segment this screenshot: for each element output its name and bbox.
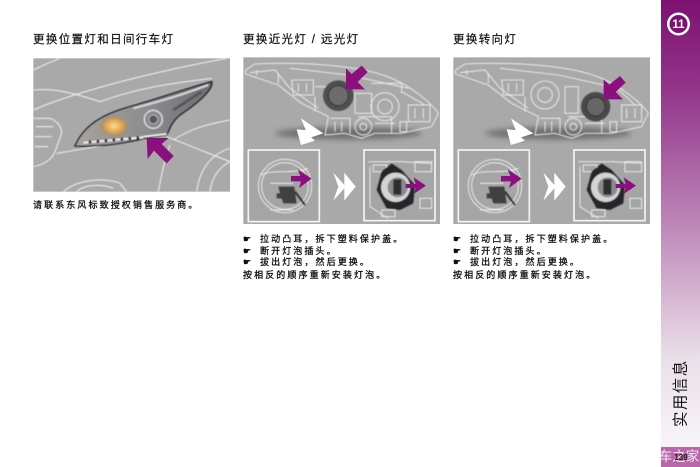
text: low and high beam steps: 拉动凸耳，拆下塑料保护盖。 — [260, 233, 404, 244]
panel: headlamp on car — [33, 58, 230, 192]
text: turn signal steps: 拉动凸耳，拆下塑料保护盖。 — [470, 233, 614, 244]
text: turn signal steps: ☛ — [453, 246, 461, 256]
icon: chapter number 11: 11 — [672, 19, 685, 31]
text: turn signal steps: ☛ — [453, 257, 461, 267]
inset: connector — [458, 150, 529, 222]
lamp cover — [581, 92, 610, 121]
text: low and high beam steps: ☛ — [243, 257, 251, 267]
text: turn signal steps: 按相反的顺序重新安装灯泡。 — [453, 269, 597, 280]
heading: turn signal: 更换转向灯 — [453, 32, 517, 46]
text: low and high beam steps: ☛ — [243, 246, 251, 256]
arrow — [346, 66, 368, 89]
arrow — [604, 76, 626, 99]
text: turn signal steps — [453, 233, 614, 280]
panel: low and high beam bulb — [243, 57, 440, 224]
sidebar: chapter tab — [659, 0, 700, 467]
inset: connector — [248, 150, 319, 222]
text: turn signal steps: 拔出灯泡，然后更换。 — [470, 256, 581, 267]
text: low and high beam steps: 按相反的顺序重新安装灯泡。 — [243, 269, 387, 280]
text: low and high beam steps — [243, 233, 404, 280]
sidebar title: 实用信息: 实用信息 — [672, 359, 690, 427]
text: low and high beam steps: 拔出灯泡，然后更换。 — [260, 256, 371, 267]
text: low and high beam steps: ☛ — [243, 234, 251, 244]
inset: bulb — [574, 150, 645, 221]
white direction chevrons — [507, 118, 533, 145]
headlamp — [75, 82, 212, 146]
double chevron — [543, 173, 566, 201]
lamp cover — [323, 80, 354, 111]
panel: turn signal bulb — [453, 57, 650, 224]
heading: position and daytime lights: 更换位置灯和日间行车灯 — [33, 32, 174, 46]
page number box with watermark: 139 — [674, 453, 688, 462]
text: caption: 请联系东风标致授权销售服务商。 — [33, 199, 200, 210]
double chevron — [333, 173, 356, 201]
page number box with watermark: 车之家 — [659, 448, 700, 464]
headlamp unit line drawing — [456, 63, 648, 138]
text: turn signal steps: 断开灯泡插头。 — [470, 245, 548, 256]
text: low and high beam steps: 断开灯泡插头。 — [260, 245, 338, 256]
headlamp unit line drawing — [246, 63, 438, 138]
text: turn signal steps: ☛ — [453, 234, 461, 244]
heading: low and high beam: 更换近光灯 / 远光灯 — [243, 32, 359, 46]
icon: chapter number 11 — [667, 12, 690, 36]
inset: bulb — [364, 150, 435, 221]
white direction chevrons — [297, 118, 323, 145]
arrow — [147, 138, 174, 163]
car body outlines — [33, 58, 230, 192]
